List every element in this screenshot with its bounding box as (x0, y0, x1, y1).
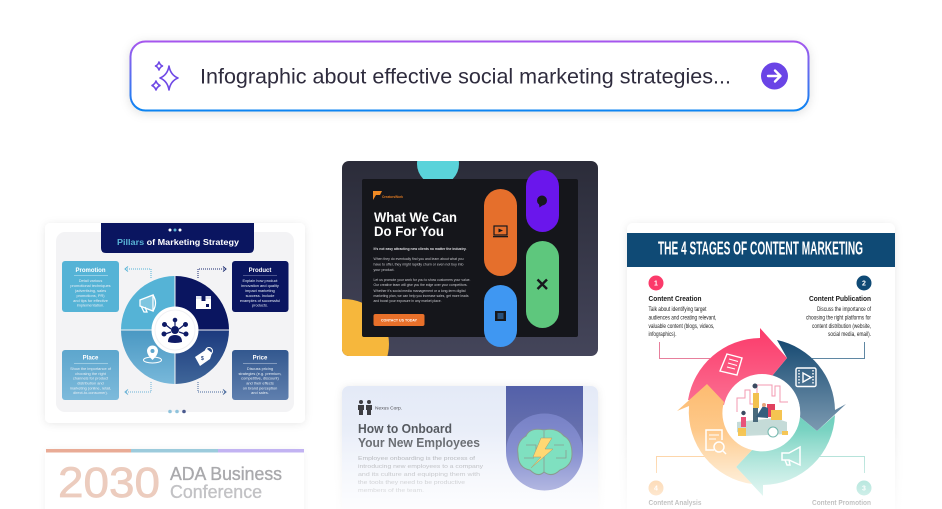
box: promotion: (advertising, sales (75, 288, 106, 293)
stage 1 text: valuable content (blogs, videos, (648, 324, 715, 330)
icon: price tag: $ (201, 356, 204, 362)
icon: analysis (706, 430, 726, 454)
panel: 2030 ada business conference (45, 449, 304, 509)
stage 3 text: 3 (862, 486, 866, 492)
box: price (232, 350, 288, 400)
panel: how to onboard your new employees (342, 386, 598, 509)
stage 1 text: Talk about identifying target (648, 307, 707, 313)
heading: Do For You (374, 224, 444, 239)
box: price: and sales. (251, 390, 269, 395)
decorative yellow circle (342, 299, 389, 356)
logo (373, 191, 403, 200)
body text: the tools they need to be productive (358, 480, 465, 486)
box: promotion: promotional techniques (70, 283, 111, 288)
icon: network person (162, 318, 188, 343)
body text: and its culture and equipping them with (358, 472, 480, 478)
heading: pillars: Pillars of Marketing Strategy (117, 238, 240, 247)
top colour stripes (46, 449, 304, 452)
box: promotion: implementation. (77, 302, 104, 308)
box: promotion: Detail various (79, 278, 102, 283)
box: price: competitive, discount) (241, 376, 280, 380)
decorative teal circle (417, 161, 459, 179)
icon: sparkles (152, 62, 178, 90)
box: promotion: and tips for effective (73, 298, 108, 303)
body text: It's not easy attracting new clients no matter the industry. (374, 247, 466, 251)
conference title: ADA Business (170, 464, 282, 484)
box: place: channels for product (73, 376, 109, 380)
box: product: Explain how product (242, 278, 278, 283)
stage 1 text: Content Creation (648, 296, 702, 303)
box: product: impact marketing (245, 288, 275, 293)
icon: megaphone (140, 295, 156, 312)
year: 2030 (58, 459, 160, 507)
box: place: Place (83, 356, 99, 362)
panel: the 4 stages of content marketing (627, 223, 895, 509)
stage 2 text: content distribution (website, (812, 324, 871, 330)
box: product: products. (252, 302, 268, 308)
body text: Our creative team will give you the edge over your competitors. (374, 283, 468, 287)
pill: blue film (484, 285, 517, 347)
logo: nexus corp (358, 400, 402, 415)
stage 4 text (648, 480, 702, 507)
heading: pillars (101, 223, 254, 253)
panel: what we can do for you (342, 161, 598, 356)
stage 2 text: choosing the right platforms for (806, 316, 871, 322)
pill: orange laptop (484, 189, 517, 276)
search prompt bar (130, 42, 808, 110)
stage 3 text: Content Promotion (812, 500, 871, 507)
box: place: Show the importance of (70, 366, 112, 371)
stage 2 text: 2 (862, 280, 866, 288)
box: price: strategies (e.g. premium, (238, 371, 282, 376)
heading: How to Onboard (358, 421, 452, 436)
stage 3 text (812, 480, 872, 507)
logo: CreatorsWork (382, 195, 403, 199)
bottom white fade (330, 430, 942, 509)
prompt text: Infographic about effective social marketing strategies... (200, 64, 731, 88)
box: promotion: Promotion (76, 268, 106, 274)
chart: four pillars circle (121, 276, 229, 384)
icon: location pin (144, 346, 162, 363)
stage 2 text: Discuss the importance of (817, 307, 871, 313)
heading (627, 233, 895, 267)
heading: Your New Employees (358, 435, 480, 450)
box: place: marketing (online, retail, (70, 386, 111, 390)
body text: your product. (374, 268, 394, 272)
box: place: direct-to-consumer). (73, 390, 108, 395)
connector lines (656, 342, 864, 473)
heading: What We Can (374, 210, 457, 225)
box: place: choosing the right (75, 371, 107, 376)
stage 1 text: infographics). (648, 332, 677, 338)
icon: box (196, 296, 211, 309)
box: product (232, 261, 288, 312)
ribbon with brain icon (506, 386, 583, 490)
box: promotion: promotions, PR) (76, 293, 105, 298)
pagination dots (168, 410, 186, 413)
stage 4 text: 4 (654, 486, 658, 492)
button (374, 314, 424, 326)
box: product: examples of successful (240, 298, 280, 303)
box: price: Price (253, 356, 268, 362)
body text: introducing new employees to a company (358, 464, 483, 470)
panel: pillars of marketing strategy (45, 223, 305, 423)
chart: cycle arrows (677, 328, 846, 496)
icon: megaphone (782, 447, 800, 465)
body text: When they do eventually find you and learn about what you (374, 257, 464, 261)
stage 4 text: Content Analysis (648, 500, 702, 507)
body text: Employee onboarding is the process of (358, 456, 476, 462)
stage 1 text: 1 (654, 280, 658, 288)
box: product: success. Include (246, 293, 274, 298)
body text: have to offer, they might rapidly churn or even not buy into (374, 262, 464, 266)
body text (358, 456, 483, 494)
pill: purple chat (526, 170, 559, 232)
stage 1 text: audiences and creating relevant, (648, 316, 717, 322)
box: product: Product (249, 268, 271, 274)
box: price: on brand perception (243, 386, 277, 390)
stage 2 text: Content Publication (809, 296, 871, 303)
stage 2 text (806, 276, 872, 338)
body text: marketing plan, we can help you increase sales, get more leads (374, 294, 469, 298)
body text: Whether it's social media management or a long-term digital (374, 289, 466, 293)
stage 2 text: social media, email). (828, 332, 871, 338)
stage 1 text (648, 276, 717, 338)
button: CONTACT US TODAY (381, 318, 418, 322)
body text: Let us promote your work for you to show customers your value. (374, 278, 470, 282)
icon: arrow button (761, 62, 788, 90)
box: product: innovation and quality (241, 283, 279, 288)
body text: members of the team. (358, 488, 425, 494)
box: promotion (62, 261, 119, 312)
icon: brain (518, 429, 572, 475)
box: price: and their effects (246, 380, 274, 386)
box: place (62, 350, 119, 400)
logo: nexus corp: Nexus Corp. (375, 406, 402, 410)
illustration: team and charts (737, 384, 788, 437)
box: place: distribution and (77, 380, 104, 386)
box: price: Discuss pricing (247, 366, 273, 371)
body text: and boost your exposure in any market place. (374, 299, 442, 303)
icon: document (720, 354, 742, 375)
pill: green cross (526, 241, 559, 328)
conference title: Conference (170, 482, 262, 502)
icon: video (796, 368, 816, 386)
body text (374, 247, 470, 303)
arrows: dotted connectors (125, 266, 226, 394)
